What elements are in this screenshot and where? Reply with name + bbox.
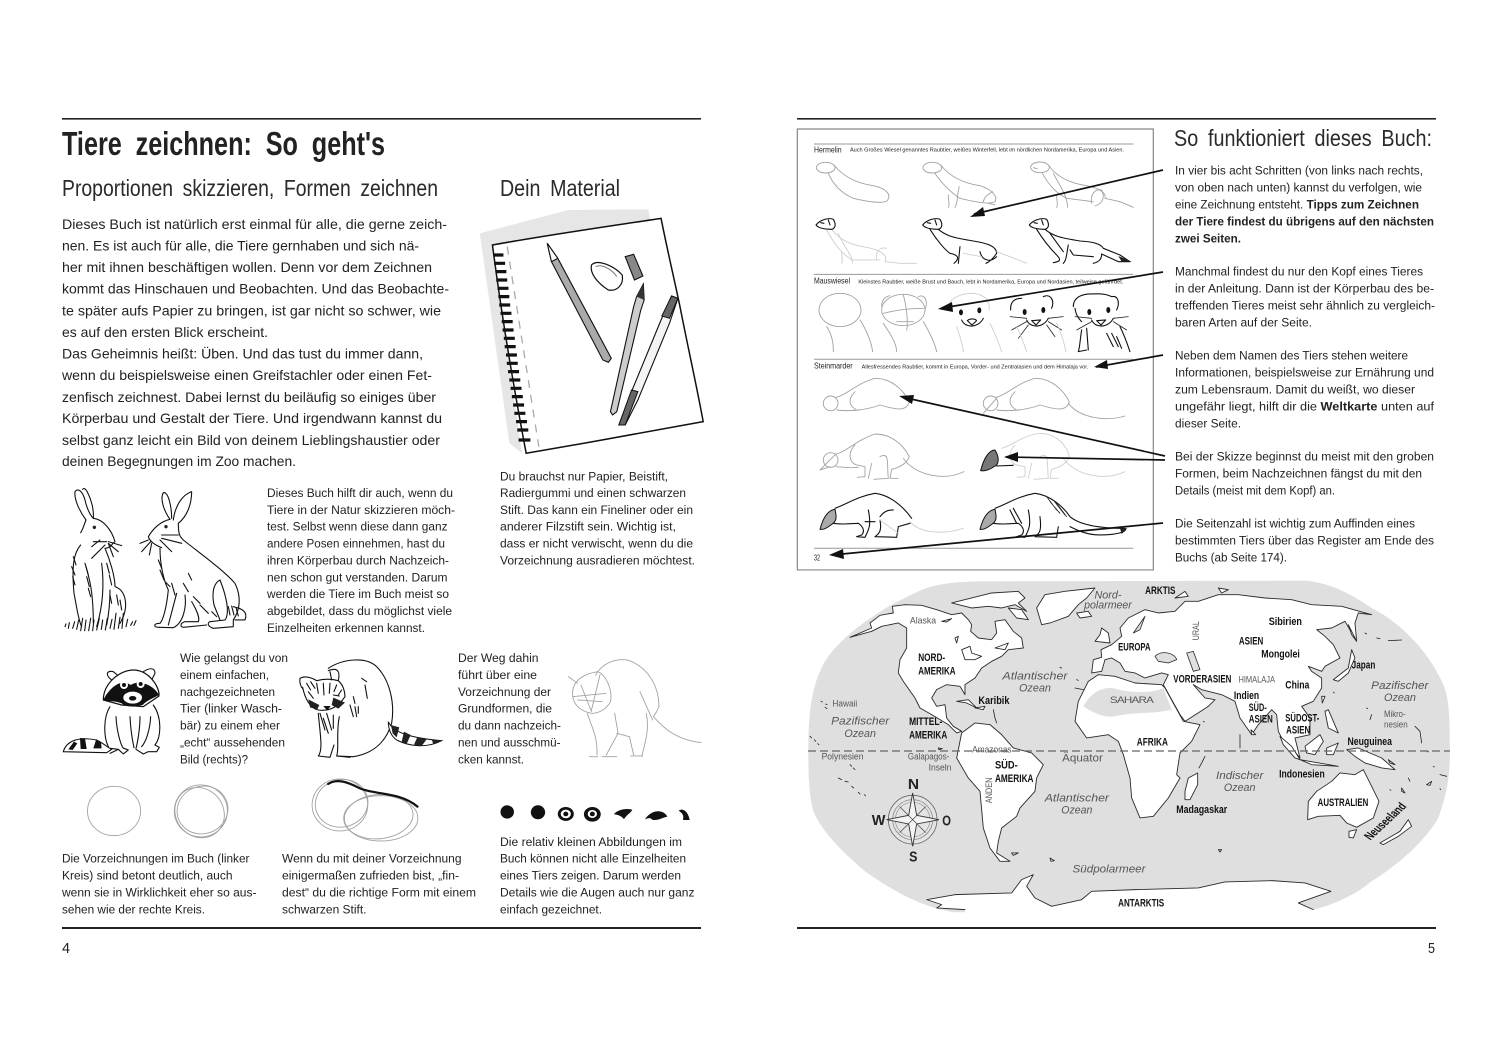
material text: anderer Filzstift sein. Wichtig ist, <box>500 520 676 534</box>
map labels: Ozean <box>1019 681 1051 694</box>
map labels: SÜD- <box>1249 700 1267 714</box>
title: Tiere zeichnen: So geht's <box>62 125 385 162</box>
map labels: AMERIKA <box>995 772 1034 785</box>
raccoon question text: bär) zu einem eher <box>180 718 280 732</box>
material text: Stift. Das kann ein Fineliner oder ein <box>500 503 693 517</box>
map labels: Indien <box>1234 689 1259 702</box>
intro text block: wenn du beispielsweise einen Greifstachler oder einen Fet- <box>61 368 432 383</box>
equator <box>808 750 1450 752</box>
map labels: Sibirien <box>1269 615 1302 628</box>
map labels: HIMALAJA <box>1238 675 1275 685</box>
map labels: ASIEN <box>1249 713 1273 725</box>
map labels: Südpolarmeer <box>1073 862 1146 875</box>
text: steps: der Tiere findest du übrigens auf den nächsten <box>1175 214 1434 228</box>
raccoon question text: nachgezeichneten <box>180 685 275 699</box>
compass letters: N <box>908 776 919 793</box>
caption: eye details: Die relativ kleinen Abbildungen im <box>500 835 682 849</box>
caption: refined sketch: schwarzen Stift. <box>282 902 366 916</box>
hare text: andere Posen einnehmen, hast du <box>267 536 445 550</box>
page frame and headings: Allesfressendes Raubtier, kommt in Europa, Vorder- und Zentralasien und dem Himalaja vor. <box>862 364 1089 370</box>
map labels: Ozean <box>1384 690 1416 704</box>
intro text block: Körperbau und Gestalt der Tiere. Und irgendwann kannst du <box>62 411 442 426</box>
caption: eye details: Details wie die Augen auch nur ganz <box>500 886 694 900</box>
map labels: NORD- <box>918 651 945 664</box>
map labels: Madagaskar <box>1176 803 1227 816</box>
text: sketching: Details (meist mit dem Kopf) an. <box>1175 484 1335 498</box>
map labels: AFRIKA <box>1137 736 1168 748</box>
intro text block: selbst ganz leicht ein Bild von deinem Lieblingshaustier oder <box>62 433 440 448</box>
text: name and habitat: Informationen, beispielsweise zur Ernährung und <box>1175 366 1434 380</box>
page frame and headings: Kleinstes Raubtier, weiße Brust und Bauch, lebt in Nordamerika, Europa und Nordasien, teilweise gefährdet. <box>858 279 1124 285</box>
text: sketching <box>1175 450 1434 498</box>
illustration: refined sketch with black line <box>311 776 418 844</box>
sketch row: Mauswiesel <box>819 293 1130 352</box>
intro text block: Dieses Buch ist natürlich erst einmal für alle, die gerne zeich- <box>62 217 447 232</box>
page frame and headings: Steinmarder <box>814 360 853 370</box>
map labels: Ozean <box>844 726 876 740</box>
raccoon question text: einem einfachen, <box>180 668 269 682</box>
path text: Grundformen, die <box>458 702 552 716</box>
text: page number: bestimmten Tiers über das Register am Ende des <box>1175 534 1434 548</box>
map labels: Indonesien <box>1279 768 1325 780</box>
heading: Proportionen skizzieren: Proportionen skizzieren, Formen zeichnen <box>62 175 438 201</box>
map labels: EUROPA <box>1118 641 1151 653</box>
intro text block <box>61 217 449 469</box>
page frame and headings: Hermelin <box>814 144 842 154</box>
intro text block: deinen Begegnungen im Zoo machen. <box>62 454 296 469</box>
path text: Der Weg dahin <box>458 651 539 665</box>
text: name and habitat: ungefähr liegt, hilft dir die Weltkarte unten auf <box>1175 400 1435 414</box>
text: page number <box>1175 516 1434 564</box>
arrows from text to sample page <box>829 170 1165 559</box>
map labels: Mikro- <box>1384 709 1406 720</box>
caption: refined sketch <box>282 852 476 916</box>
caption: eye details: Buch können nicht alle Einzelheiten <box>500 852 686 866</box>
text: steps: eine Zeichnung entsteht. Tipps zum Zeichnen <box>1175 198 1419 212</box>
map labels: Amazonas <box>972 745 1012 755</box>
illustration: seven eye stages <box>500 805 690 822</box>
map labels: AUSTRALIEN <box>1318 796 1368 809</box>
map labels: ANTARKTIS <box>1118 897 1164 909</box>
page frame and headings: Mauswiesel <box>814 275 850 285</box>
path text: führt über eine <box>458 668 537 682</box>
illustration: two hares <box>65 489 246 631</box>
text: sketching: Formen, beim Nachzeichnen fängst du mit den <box>1175 466 1422 480</box>
compass letters: S <box>909 848 917 865</box>
illustration: two circles <box>88 783 232 841</box>
map labels: Alaska <box>910 615 936 626</box>
raccoon question text <box>180 651 288 766</box>
illustration: cartoon raccoon <box>63 669 160 754</box>
text: steps: von oben nach unten) kannst du verfolgen, wie <box>1175 180 1422 194</box>
sketch row: Steinmarder <box>820 378 1127 537</box>
world map <box>808 581 1450 915</box>
compass letters <box>872 776 951 865</box>
arrow 5 <box>1004 452 1165 462</box>
caption: circles: Kreis) sind betont deutlich, auch <box>62 868 233 882</box>
map labels: Neuseeland <box>1361 800 1410 842</box>
arrow 1 <box>970 170 1163 217</box>
caption: circles <box>61 852 256 916</box>
text: sketching: Bei der Skizze beginnst du meist mit den groben <box>1175 450 1434 464</box>
hare text: Dieses Buch hilft dir auch, wenn du <box>267 486 453 500</box>
map labels: SÜDOST- <box>1285 711 1319 724</box>
text: head only: Manchmal findest du nur den Kopf eines Tieres <box>1175 264 1423 278</box>
text: steps: zwei Seiten. <box>1175 232 1241 246</box>
text: head only: baren Arten auf der Seite. <box>1175 316 1312 330</box>
map labels: Karibik <box>978 694 1010 707</box>
hare text: abgebildet, dass du möglichst viele <box>267 604 452 618</box>
map labels: Äquator <box>1062 751 1103 764</box>
caption: circles: sehen wie der rechte Kreis. <box>62 902 205 916</box>
caption: eye details <box>500 835 694 916</box>
material text: Du brauchst nur Papier, Beistift, <box>500 470 668 484</box>
map labels: ANDEN <box>984 777 995 803</box>
map labels: Indischer <box>1216 768 1264 782</box>
caption: eye details: eines Tiers zeigen. Darum werden <box>500 868 681 882</box>
intro text block: te später aufs Papier zu bringen, ist gar nicht so schwer, wie <box>62 304 441 318</box>
text: steps <box>1175 164 1434 246</box>
raccoon question text: Tier (linker Wasch- <box>180 702 282 716</box>
map labels: URAL <box>1191 621 1202 640</box>
map labels: MITTEL- <box>909 715 942 728</box>
map labels: Ozean <box>1224 780 1255 794</box>
material text: Radiergummi und einen schwarzen <box>500 486 686 500</box>
map labels: ASIEN <box>1286 724 1310 736</box>
intro text block: Das Geheimnis heißt: Üben. Und das tust du immer dann, <box>62 346 423 362</box>
map labels: Pazifischer <box>1371 678 1429 692</box>
sketch row: Hermelin <box>816 162 1133 263</box>
compass letters: O <box>942 812 951 829</box>
hare text: werden die Tiere im Buch meist so <box>266 587 449 601</box>
map labels: ARKTIS <box>1145 584 1175 597</box>
text: steps: In vier bis acht Schritten (von links nach rechts, <box>1175 164 1423 178</box>
caption: circles: wenn sie in Wirklichkeit eher so aus- <box>61 886 256 900</box>
page number left: 4 <box>62 940 70 957</box>
hare text <box>266 486 455 635</box>
heading: Dein Material: Dein Material <box>500 175 620 201</box>
arrow 4 <box>899 395 1165 456</box>
map labels: ASIEN <box>1239 635 1263 647</box>
arrow 2 <box>938 272 1163 312</box>
page frame and headings: 32 <box>814 553 820 562</box>
map labels: Atlantischer <box>1044 791 1110 804</box>
caption: eye details: einfach gezeichnet. <box>500 902 602 916</box>
path text: cken kannst. <box>458 752 524 766</box>
material text <box>500 470 695 568</box>
map labels: Mongolei <box>1261 648 1300 660</box>
page number right: 5 <box>1428 940 1435 957</box>
illustration: notebook with pencil, eraser and pens <box>480 209 703 453</box>
caption: refined sketch: Wenn du mit deiner Vorzeichnung <box>282 852 462 866</box>
raccoon question text: Bild (rechts)? <box>180 752 248 766</box>
material text: dass er nicht verwischt, wenn du die <box>500 536 693 550</box>
map labels: SÜD- <box>995 758 1018 771</box>
hare text: Einzelheiten erkennen kannst. <box>267 621 425 635</box>
text: name and habitat <box>1175 348 1435 430</box>
text: name and habitat: Neben dem Namen des Tiers stehen weitere <box>1175 348 1408 362</box>
map labels: polarmeer <box>1083 598 1132 611</box>
page frame and headings: Auch Großes Wiesel genanntes Raubtier, weißes Winterfell, lebt im nördlichen Nordamerika, Europa und Asien. <box>850 148 1124 154</box>
intro text block: nen. Es ist auch für alle, die Tiere gernhaben und sich nä- <box>62 238 419 254</box>
map labels: Japan <box>1352 659 1375 671</box>
map labels: Hawaii <box>832 699 857 709</box>
compass rose <box>887 793 939 846</box>
raccoon question text: Wie gelangst du von <box>180 651 288 665</box>
path text: Vorzeichnung der <box>458 685 551 699</box>
map background <box>808 581 1450 912</box>
map labels <box>822 584 1429 909</box>
map labels: Polynesien <box>822 752 864 762</box>
map labels: nesien <box>1384 720 1408 730</box>
map labels: SAHARA <box>1110 695 1154 706</box>
caption: circles: Die Vorzeichnungen im Buch (linker <box>62 852 250 866</box>
map labels: AMERIKA <box>909 729 947 741</box>
text: head only <box>1175 264 1435 330</box>
page frame and headings <box>797 129 1153 570</box>
text: head only: treffenden Tieres meist sehr ähnlich zu vergleich- <box>1175 298 1435 312</box>
map labels: Inseln <box>929 763 952 773</box>
panel: sample book page <box>797 129 1153 570</box>
hare text: Tiere in der Natur skizzieren möch- <box>267 503 455 517</box>
text: name and habitat: dieser Seite. <box>1175 416 1241 430</box>
text: name and habitat: zum Lebensraum. Damit du weißt, wo dieser <box>1175 382 1415 396</box>
arrow 6 <box>829 523 1163 559</box>
map labels: Nord- <box>1095 588 1121 601</box>
compass letters: W <box>872 812 886 829</box>
text: head only: in der Anleitung. Dann ist der Körperbau des be- <box>1175 282 1434 296</box>
intro text block: her mit ihnen beschäftigen wollen. Denn vor dem Zeichnen <box>62 260 432 275</box>
hare text: test. Selbst wenn diese dann ganz <box>267 520 448 534</box>
map labels: Neuguinea <box>1348 735 1392 748</box>
map labels: Pazifischer <box>831 714 890 727</box>
path text: du dann nachzeich- <box>458 718 561 732</box>
caption: refined sketch: einigermaßen zufrieden bist, „fin- <box>282 868 459 882</box>
heading: So funktioniert dieses Buch: So funktioniert dieses Buch: <box>1174 125 1432 151</box>
map labels: Galapagos- <box>908 751 950 762</box>
intro text block: es auf den ersten Blick erscheint. <box>62 325 268 340</box>
illustration: realistic raccoon <box>300 660 442 757</box>
raccoon question text: „echt“ aussehenden <box>180 736 285 750</box>
map labels: AMERIKA <box>918 665 956 677</box>
map labels: Atlantischer <box>1001 669 1068 682</box>
text: page number: Die Seitenzahl ist wichtig zum Auffinden eines <box>1175 516 1415 530</box>
arrow 3 <box>1094 355 1163 369</box>
path text: nen und ausschmü- <box>458 736 560 750</box>
material text: Vorzeichnung ausradieren möchtest. <box>500 554 695 568</box>
continents: Eurasia, Africa, Australia <box>1075 588 1447 852</box>
intro text block: zenfisch zeichnest. Dabei lernst du beiläufig so einiges über <box>62 390 436 405</box>
continents: Americas <box>810 588 1331 915</box>
map labels: China <box>1285 679 1309 691</box>
map labels: VORDERASIEN <box>1173 673 1231 685</box>
hare text: ihren Körperbau durch Nachzeich- <box>267 554 449 568</box>
illustration: raccoon construction sketch <box>568 660 701 757</box>
hare text: nen schon gut verstanden. Darum <box>267 570 448 584</box>
intro text block: kommt das Hinschauen und Beobachten. Und das Beobachte- <box>62 282 449 296</box>
text: page number: Buchs (ab Seite 174). <box>1175 550 1287 564</box>
map labels: Ozean <box>1061 803 1092 816</box>
path text <box>458 651 561 766</box>
caption: refined sketch: dest“ du die richtige Form mit einem <box>282 886 476 900</box>
